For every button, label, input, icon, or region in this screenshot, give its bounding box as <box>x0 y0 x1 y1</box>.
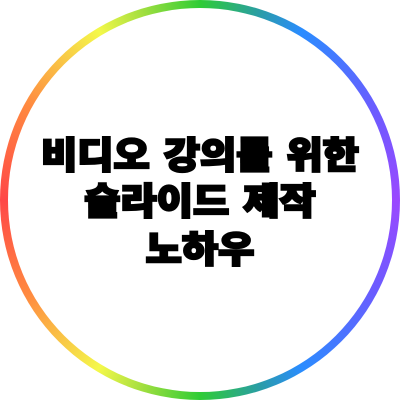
title line 1: 비디오 강의를 위한 <box>41 137 359 177</box>
title line 2: 슬라이드 제작 <box>84 183 316 223</box>
title line 3: 노하우 <box>146 231 254 271</box>
